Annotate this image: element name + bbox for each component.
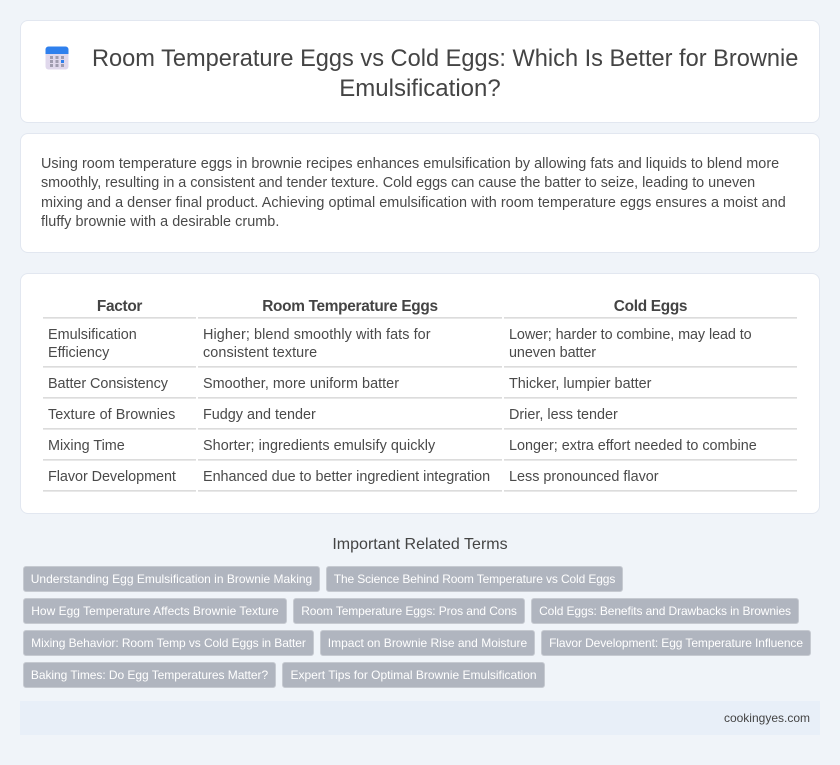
tag [293,598,525,624]
table header: room temperature eggs: Room Temperature Eggs [262,298,438,315]
cell: cold batter: Thicker, lumpier batter [509,376,651,392]
cell: room temperature mixing: Shorter; ingredients emulsify quickly [203,438,435,454]
tag: Mixing Behavior: Room Temp vs Cold Eggs in Batter [31,636,306,650]
tag: Flavor Development: Egg Temperature Influence [549,636,803,650]
title [92,46,798,102]
text block: introduction: fluffy brownie with a desirable crumb. [41,214,279,230]
icon: calendar grid [46,46,68,70]
panel: introduction [20,133,820,253]
cell: cold flavor: Less pronounced flavor [509,469,659,485]
tag [541,630,811,656]
row: emulsification efficiency [48,327,137,361]
tag: Room Temperature Eggs: Pros and Cons [301,604,517,618]
tag [23,566,320,592]
tag [326,566,623,592]
cell: cold emulsification: uneven batter [509,345,596,361]
table header: factor: Factor [97,298,142,315]
tag: Understanding Egg Emulsification in Brownie Making [31,572,312,586]
tag [23,662,276,688]
tag: Expert Tips for Optimal Brownie Emulsification [290,668,537,682]
row: texture of brownies: Texture of Brownies [48,407,175,423]
cell: room temperature emulsification [203,327,431,361]
cell: room temperature flavor: Enhanced due to better ingredient integration [203,469,490,485]
footer source: cookingyes.com [724,711,810,725]
heading: important related terms: Important Related Terms [332,536,508,553]
tag: Cold Eggs: Benefits and Drawbacks in Brownies [539,604,791,618]
tag [320,630,535,656]
row: flavor development: Flavor Development [48,469,176,485]
tag [282,662,545,688]
cell: cold mixing: Longer; extra effort needed to combine [509,438,757,454]
title: Room Temperature Eggs vs Cold Eggs: Which Is Better for Brownie [92,46,798,72]
table header: cold eggs: Cold Eggs [614,298,687,315]
cell: cold emulsification: Lower; harder to combine, may lead to [509,327,752,343]
cell: cold emulsification [509,327,752,361]
panel: comparison table [20,273,820,514]
row: emulsification efficiency: Emulsification [48,327,137,343]
text block: introduction: mixing and a denser final product. Achieving optimal emulsification with room temperature eggs ensures a moist and [41,195,786,211]
tag [23,598,287,624]
tag [531,598,799,624]
cell: room temperature batter: Smoother, more uniform batter [203,376,399,392]
cell: room temperature emulsification: Higher; blend smoothly with fats for [203,327,431,343]
text block: introduction: smoothly, resulting in a consistent and tender texture. Cold eggs can cause the batter to seize, leading to uneven [41,175,755,191]
tag: The Science Behind Room Temperature vs Cold Eggs [334,572,615,586]
tag: Impact on Brownie Rise and Moisture [328,636,527,650]
text block: introduction [41,156,786,230]
row: mixing time: Mixing Time [48,438,125,454]
tag: Baking Times: Do Egg Temperatures Matter? [31,668,268,682]
tag [23,630,314,656]
footer bar [20,701,820,735]
cell: room temperature texture: Fudgy and tender [203,407,316,423]
title: Emulsification? [339,75,501,102]
row: emulsification efficiency: Efficiency [48,345,109,361]
cell: cold texture: Drier, less tender [509,407,618,423]
row: batter consistency: Batter Consistency [48,376,168,392]
panel: header [20,20,820,123]
tag: How Egg Temperature Affects Brownie Texture [31,604,279,618]
text block: introduction: Using room temperature eggs in brownie recipes enhances emulsification by allowing fats and liquids to blend more [41,156,779,172]
cell: room temperature emulsification: consistent texture [203,345,317,361]
